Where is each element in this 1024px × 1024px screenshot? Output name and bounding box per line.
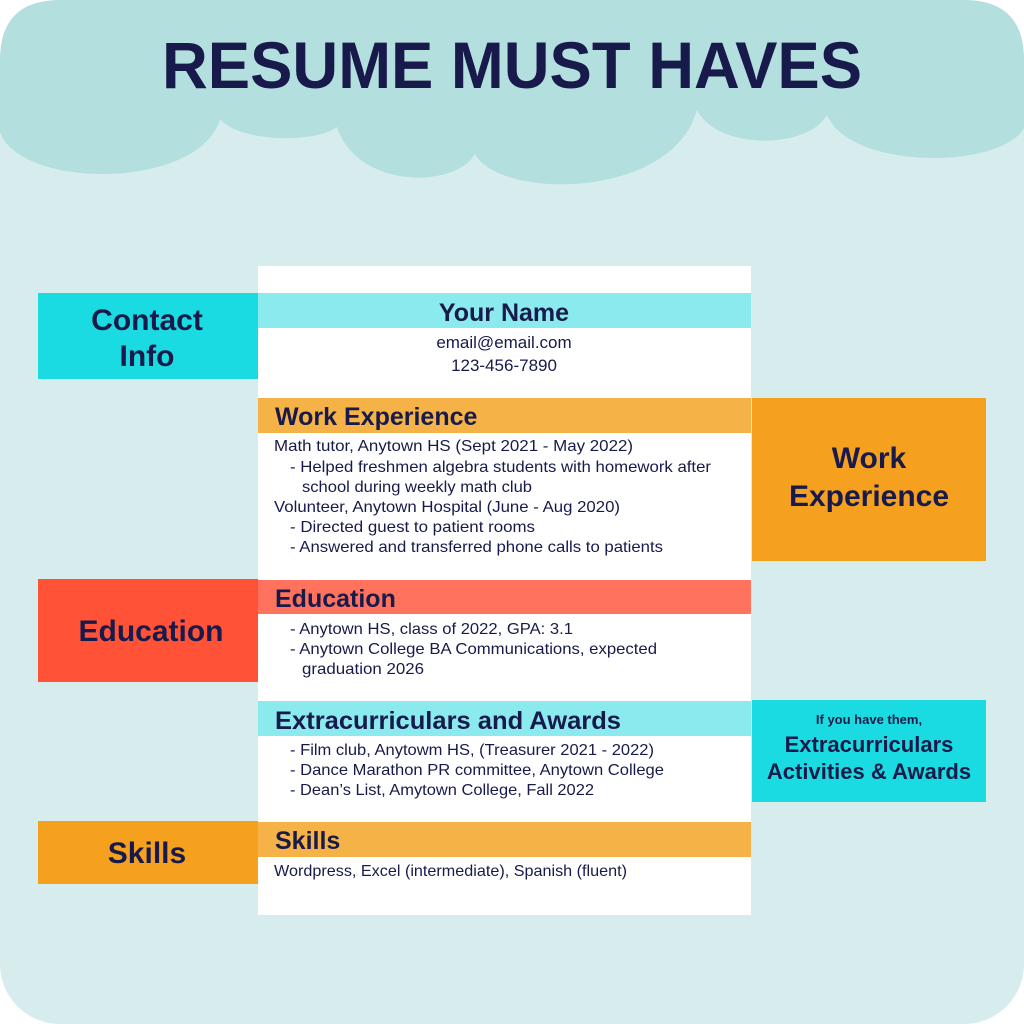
label: extracurriculars: Extracurriculars [785,732,953,757]
education section: graduation 2026 [302,661,424,678]
education section: - Anytown College BA Communications, expected [290,641,657,658]
work experience section: Math tutor, Anytown HS (Sept 2021 - May 2022) [274,438,633,455]
skills section: Wordpress, Excel (intermediate), Spanish (fluent) [274,863,627,880]
work experience section: Volunteer, Anytown Hospital (June - Aug 2020) [274,499,620,516]
work experience section: - Directed guest to patient rooms [290,519,535,536]
label: contact info [38,293,258,379]
contact section: Your Name [439,299,569,327]
extracurriculars section [258,701,751,799]
label: work experience: Work [832,442,907,475]
label: work experience [752,398,986,561]
contact section: email@email.com [436,333,572,352]
extracurriculars section: - Film club, Anytowm HS, (Treasurer 2021 - 2022) [290,742,654,759]
education section [258,580,751,678]
extracurriculars section: - Dance Marathon PR committee, Anytown College [290,762,664,779]
work experience section [258,398,751,556]
extracurriculars section: Extracurriculars and Awards [275,707,621,735]
label: extracurriculars: If you have them, [816,712,922,727]
contact section: 123-456-7890 [451,356,557,375]
work experience section: school during weekly math club [302,479,532,496]
extracurriculars section: - Dean’s List, Amytown College, Fall 2022 [290,782,594,799]
label: skills [38,821,258,884]
work experience section: - Answered and transferred phone calls to patients [290,539,663,556]
resume paper [258,266,751,915]
label: extracurriculars: Activities & Awards [767,759,971,784]
label: education [38,579,258,682]
label: contact info: Info [120,340,174,373]
label: work experience: Experience [789,480,949,513]
skills section [258,822,751,880]
title: RESUME MUST HAVES [162,28,862,102]
cloud header [0,0,1024,184]
label: skills: Skills [108,837,186,870]
work experience section: Work Experience [275,403,478,431]
work experience section: - Helped freshmen algebra students with homework after [290,459,712,476]
education section: Education [275,585,396,613]
label: extracurriculars [752,700,986,802]
label: contact info: Contact [91,304,203,337]
label: education: Education [78,615,224,648]
skills section: Skills [275,827,340,855]
education section: - Anytown HS, class of 2022, GPA: 3.1 [290,621,573,638]
contact section [258,293,751,375]
